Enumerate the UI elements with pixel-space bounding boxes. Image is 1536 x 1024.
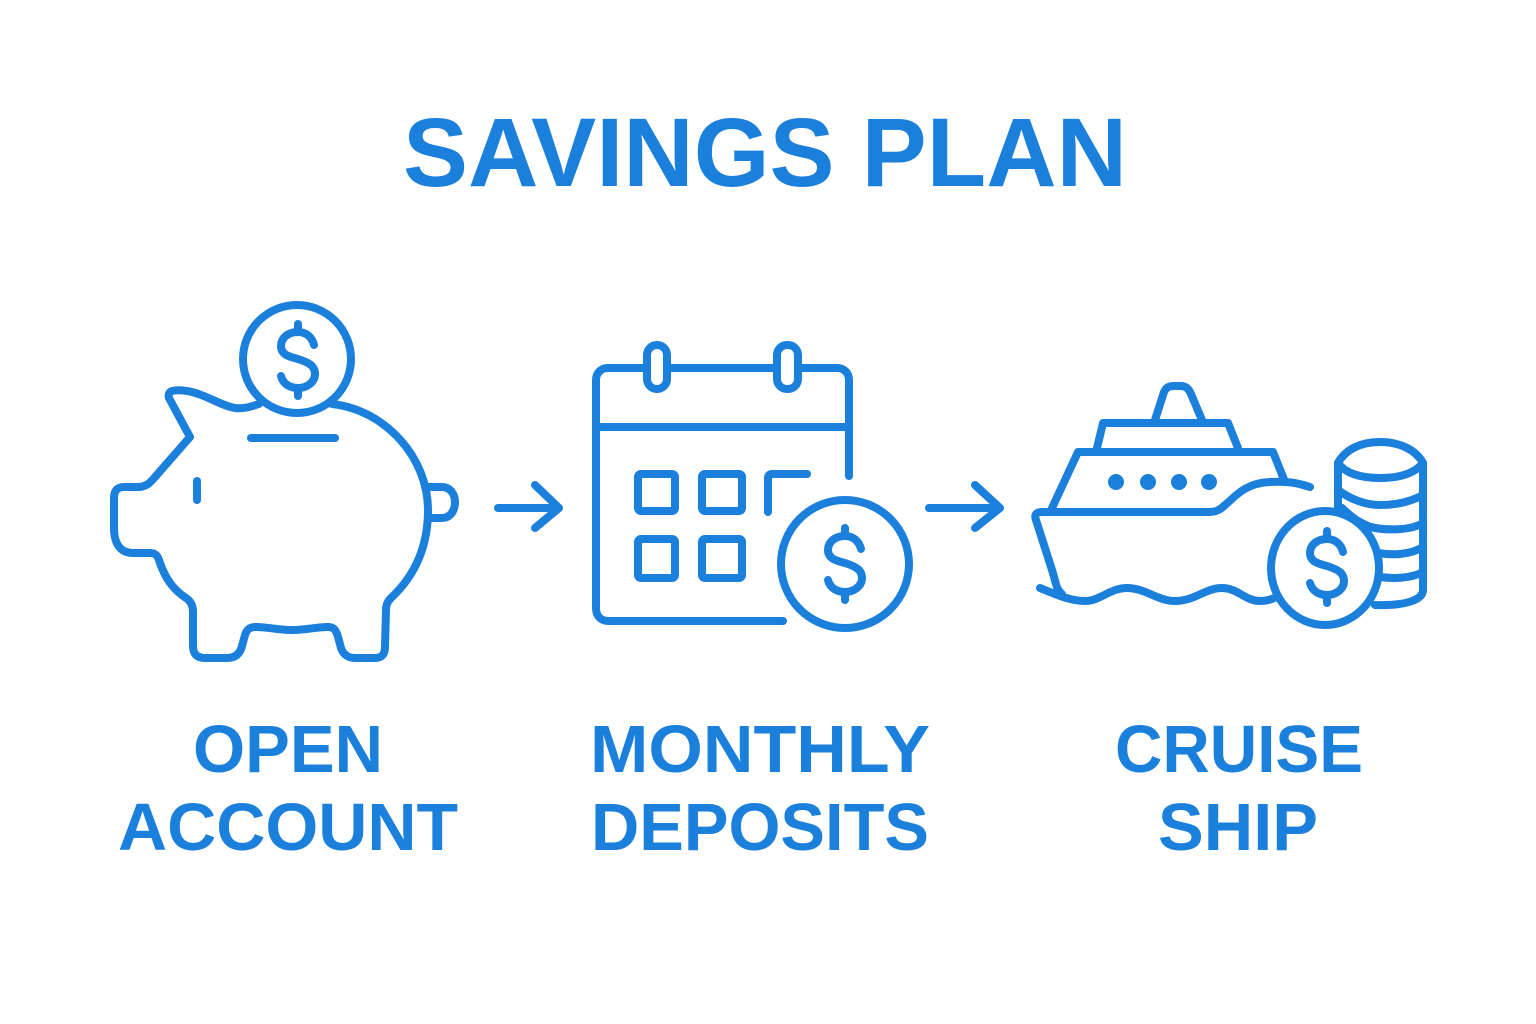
title: SAVINGS PLAN <box>403 98 1127 207</box>
icon: coin by ship <box>1271 511 1379 625</box>
label: open account: ACCOUNT <box>118 790 458 865</box>
label: cruise ship <box>1115 712 1363 865</box>
icon: piggy eye <box>193 481 201 500</box>
label: monthly deposits: MONTHLY <box>590 712 930 787</box>
icon: coin above piggy <box>243 305 351 413</box>
arrow: step two to three <box>929 485 1000 528</box>
icon: piggy tail <box>428 487 455 518</box>
icon: coin stack <box>1338 442 1423 605</box>
icon: water waves <box>1040 588 1274 601</box>
icon: calendar with coin <box>596 345 909 628</box>
label: cruise ship: CRUISE <box>1115 712 1363 787</box>
icon: ship portholes <box>1108 474 1217 490</box>
icon: ship hull and bow wave <box>1035 482 1310 594</box>
icon: coin on calendar <box>781 500 909 628</box>
label: open account <box>118 712 458 865</box>
icon: cruise ship with coins <box>1035 386 1423 625</box>
arrow: step one to two <box>498 485 559 528</box>
icon: coin slot <box>251 434 335 442</box>
label: open account: OPEN <box>193 712 383 787</box>
label: monthly deposits <box>590 712 930 865</box>
label: cruise ship: SHIP <box>1158 790 1318 865</box>
label: monthly deposits: DEPOSITS <box>591 790 929 865</box>
icon: piggy bank with coin <box>114 305 455 658</box>
